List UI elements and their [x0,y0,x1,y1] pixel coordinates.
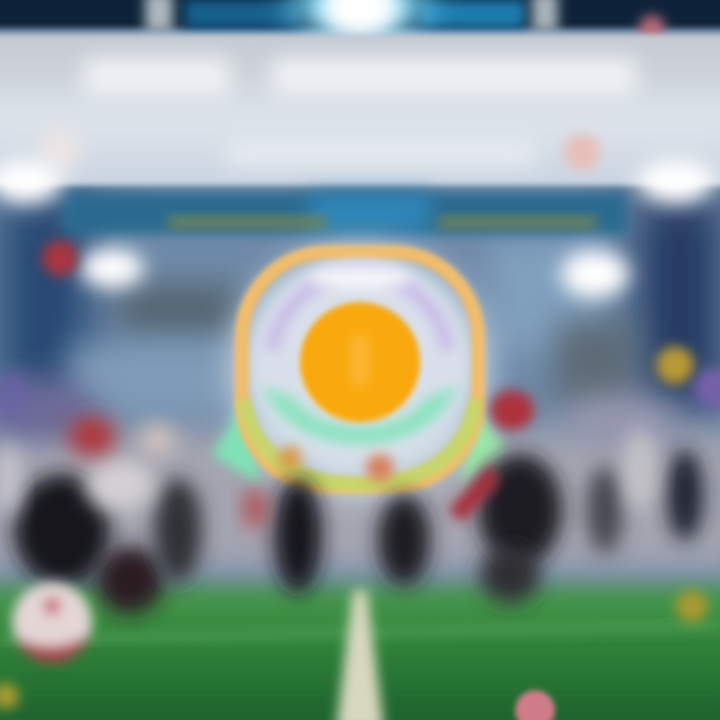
headline line two [226,140,536,166]
corner confetti [0,683,19,709]
subtitle left [168,216,326,228]
football [12,582,92,663]
floodlight glows [0,160,714,298]
inner panel [256,262,464,462]
title banner [0,34,720,186]
top lighting band [0,0,720,41]
red balloon [42,240,78,276]
outer ring [242,252,478,486]
players left group [0,416,202,614]
pitch [0,585,720,720]
central emblem [212,245,505,495]
subtitle right [438,216,596,228]
players centre group [244,446,430,593]
headline line one [84,58,636,96]
pink ball [515,690,555,720]
yellow confetti [676,590,708,622]
players right group [448,390,703,603]
soft halo [230,245,490,495]
blue subtitle band [62,192,628,234]
green side wedges [212,400,262,485]
left purple accent [0,375,28,415]
centre line [336,590,384,720]
yellow balloon [656,346,694,384]
purple balloon [694,368,720,408]
gold coin [300,302,420,422]
